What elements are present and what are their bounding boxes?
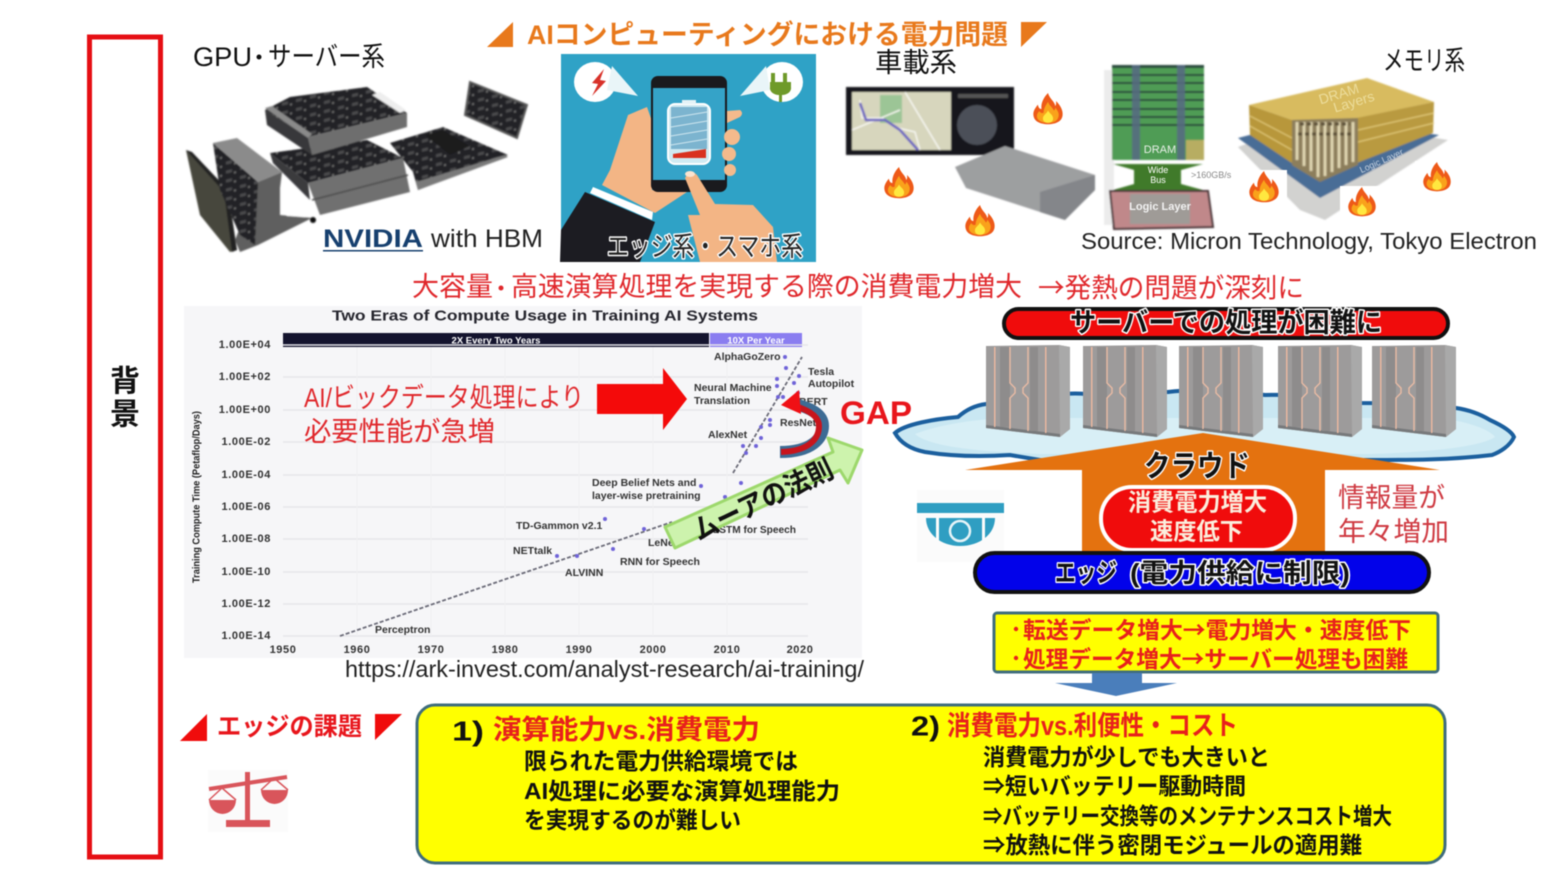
label: DRAM Layers text [1317, 76, 1376, 119]
y axis labels: 1.00E-12 [222, 598, 271, 610]
data point labels: BERT [799, 396, 828, 408]
data point labels: Translation [694, 395, 750, 407]
era bar: 10X per year: 10X Per Year [727, 336, 785, 346]
y axis title: Training Compute Time (Petaflop/Days) [192, 411, 202, 583]
side frame: 背景: 景 [110, 398, 140, 432]
text block: 2) body [983, 744, 1392, 858]
side frame: 背景: 背 [110, 366, 140, 398]
x axis labels: 1990 [566, 644, 592, 656]
cloud [895, 390, 1514, 460]
pill: エッジ（電力供給に制限） [975, 553, 1429, 592]
data point labels: TD-Gammon v2.1 [516, 520, 603, 532]
text block: 2) body: ⇒放熱に伴う密閉モジュールの適用難 [983, 832, 1362, 858]
text block: 1) body: 限られた電力供給環境では [524, 748, 798, 774]
pill: 消費電力増大 速度低下 [1101, 487, 1295, 550]
panel: 演算能力と消費電力の課題 [417, 705, 1445, 863]
data point labels: AlexNet [708, 429, 748, 441]
text: 情報量が年々増加 [1338, 483, 1449, 547]
headline: 消費電力増大と発熱: 高速演算処理を実現する際の消費電力増大 [511, 272, 1022, 302]
pill: 消費電力増大 速度低下: 消費電力増大 [1128, 490, 1267, 516]
label: GPU・サーバー系: GPU [193, 42, 252, 72]
label: メモリ系: メモリ系 [1383, 46, 1465, 76]
label: DRAM Layers text: Layers [1331, 88, 1376, 115]
label: DRAM stack text: DRAM [1144, 144, 1176, 156]
icon: flame [1033, 93, 1063, 124]
heading: 1): 演算能力vs.消費電力 [493, 715, 760, 745]
icon: flame [1415, 161, 1459, 193]
heading: 1): 1) [452, 716, 484, 746]
label: NVIDIA with HBM: with HBM [430, 225, 543, 253]
data point labels: LSTM for Speech [713, 524, 796, 536]
image: HBM DRAM stack and logic layer [1104, 65, 1213, 229]
title: AIコンピューティングにおける電力問題: AIコンピューティングにおける電力問題 [527, 19, 1008, 50]
text block: 2) body: 消費電力が少しでも大きいと [983, 744, 1270, 770]
heading: 2): 2) [911, 710, 940, 742]
label: DRAM stack text: Wide [1148, 165, 1168, 175]
sleeve [560, 187, 655, 262]
pill: 消費電力増大 速度低下: 速度低下 [1150, 518, 1243, 546]
y axis labels: 1.00E-06 [222, 501, 271, 513]
data point labels: RNN for Speech [620, 556, 700, 568]
y axis labels: 1.00E-08 [222, 533, 271, 545]
arrow: blue down [1055, 673, 1177, 696]
image: NVIDIA GPU server exploded view [186, 82, 527, 252]
callout: AI/ビックデータ処理により必要性能が急増 [304, 383, 584, 447]
data point labels: Autopilot [808, 378, 855, 390]
x axis labels: 1950 [270, 644, 296, 656]
era bar: 2X every two years [283, 333, 709, 347]
icon: surveillance camera [917, 490, 1004, 562]
label: NVIDIA with HBM [323, 225, 543, 253]
label: GAP: GAP [840, 395, 912, 431]
y axis labels: 1.00E-02 [222, 436, 271, 448]
pill: エッジ（電力供給に制限）: (電力供給に制限) [1130, 558, 1350, 588]
heading: 2): 消費電力vs.利便性・コスト [947, 711, 1238, 741]
label: 車載系: 車載系 [875, 48, 957, 78]
text block: 2) body: ⇒短いバッテリー駆動時間 [983, 773, 1246, 799]
x axis labels: 1970 [418, 644, 444, 656]
x axis labels [270, 644, 813, 656]
label: Logic Layer on base: Logic Layer [1358, 147, 1405, 175]
label: DRAM stack text: Logic Layer [1129, 201, 1192, 213]
label: GPU・サーバー系: サーバー系 [268, 42, 385, 72]
label: GPU・サーバー系 [193, 42, 385, 72]
chart title: Two Eras of Compute Usage in Training AI Systems [332, 308, 758, 324]
servers [986, 345, 1456, 437]
icon: flame [884, 167, 914, 198]
x axis labels: 2000 [640, 644, 666, 656]
x axis labels: 1980 [492, 644, 518, 656]
y axis labels [219, 339, 271, 642]
label: DRAM stack text [1129, 144, 1232, 213]
image: memory stack 3D block [1238, 78, 1448, 220]
side frame: 背景 [90, 37, 160, 857]
pill: エッジ（電力供給に制限）: エッジ [1055, 558, 1117, 588]
source note: Source: Micron Technology, Tokyo Electron [1081, 228, 1537, 254]
text block: 2) body: ⇒バッテリー交換等のメンテナンスコスト増大 [983, 803, 1392, 829]
data point labels: Perceptron [375, 624, 430, 636]
y axis labels: 1.00E+02 [219, 371, 271, 383]
icon: phone [651, 76, 727, 192]
text block: 1) body: AI処理に必要な演算処理能力 [524, 778, 840, 804]
headline: 消費電力増大と発熱 [412, 266, 1304, 306]
text block: 1) body: を実現するのが難しい [524, 807, 741, 833]
data point labels: ResNets [780, 417, 822, 429]
icon: balance scale [208, 770, 288, 832]
label: DRAM Layers text: DRAM [1317, 80, 1361, 107]
trend lines [340, 357, 802, 636]
y axis labels: 1.00E+04 [219, 339, 271, 351]
left hand [602, 107, 687, 213]
y axis labels: 1.00E-04 [222, 469, 271, 481]
era bar: 2X every two years: 2X Every Two Years [452, 336, 540, 346]
data point labels: AlphaGoZero [714, 351, 781, 363]
text block: 1) body [524, 748, 840, 833]
heading: エッジの課題 [180, 713, 402, 741]
x axis labels: 2020 [787, 644, 813, 656]
data point labels: Tesla [808, 366, 834, 378]
text: 情報量が年々増加: 情報量が [1338, 483, 1445, 513]
image: in-vehicle display and ECU [846, 87, 1095, 220]
box: データ増大の課題 [994, 611, 1438, 674]
y axis labels: 1.00E-10 [222, 566, 271, 578]
icon: flame [1340, 186, 1384, 218]
box: データ増大の課題: 処理データ増大→サーバー処理も困難 [1023, 640, 1408, 674]
box: データ増大の課題: 転送データ増大→電力増大・速度低下 [1023, 611, 1411, 645]
right fingers [722, 110, 742, 176]
x axis labels: 1960 [344, 644, 370, 656]
chart: Two Eras of Compute Usage [184, 306, 862, 658]
arrow: orange up [965, 433, 1440, 552]
text: 情報量が年々増加: 年々増加 [1338, 517, 1449, 547]
icon: lightning bubble [574, 62, 638, 102]
callout: AI/ビックデータ処理により必要性能が急増: 必要性能が急増 [304, 417, 495, 447]
data point labels: layer-wise pretraining [592, 490, 701, 502]
data points [555, 355, 801, 558]
arrow: U-turn GAP [780, 390, 823, 452]
icon: flame [1246, 170, 1287, 206]
label: DRAM stack text: Bus [1150, 175, 1166, 185]
data point labels: Deep Belief Nets and [592, 477, 696, 489]
image: smartphone edge device: エッジ系・スマホ系 [607, 232, 803, 262]
arrow: ムーアの法則: ムーアの法則 [688, 453, 838, 547]
heading: エッジの課題: エッジの課題 [217, 713, 362, 741]
data point labels: ALVINN [565, 567, 603, 579]
label: NVIDIA with HBM: NVIDIA [323, 225, 423, 253]
label: DRAM stack text: >160GB/s [1191, 170, 1232, 180]
data point labels [375, 351, 855, 636]
x axis labels: 2010 [714, 644, 740, 656]
y axis labels: 1.00E+00 [219, 404, 271, 416]
data point labels: LeNet [648, 537, 678, 549]
callout: AI/ビックデータ処理により必要性能が急増: AI/ビックデータ処理により [304, 383, 584, 413]
pill: サーバーでの処理が困難に: サーバーでの処理が困難に [1070, 307, 1382, 338]
image: smartphone edge device [560, 54, 816, 262]
era bar: 10X per year [710, 333, 802, 347]
label: クラウド: クラウド [1144, 450, 1250, 484]
headline: 消費電力増大と発熱: 大容量 [412, 272, 493, 302]
source URL: https://ark-invest.com/analyst-research/ai-training/ [345, 656, 865, 682]
data point labels: Neural Machine [694, 382, 772, 394]
arrow: red right [597, 368, 687, 430]
headline: 消費電力増大と発熱: →発熱の問題が深刻に [1038, 266, 1304, 306]
y axis labels: 1.00E-14 [222, 630, 271, 642]
data point labels: NETtalk [513, 545, 552, 557]
icon: flame [965, 205, 995, 236]
icon: plug bubble [740, 62, 803, 102]
